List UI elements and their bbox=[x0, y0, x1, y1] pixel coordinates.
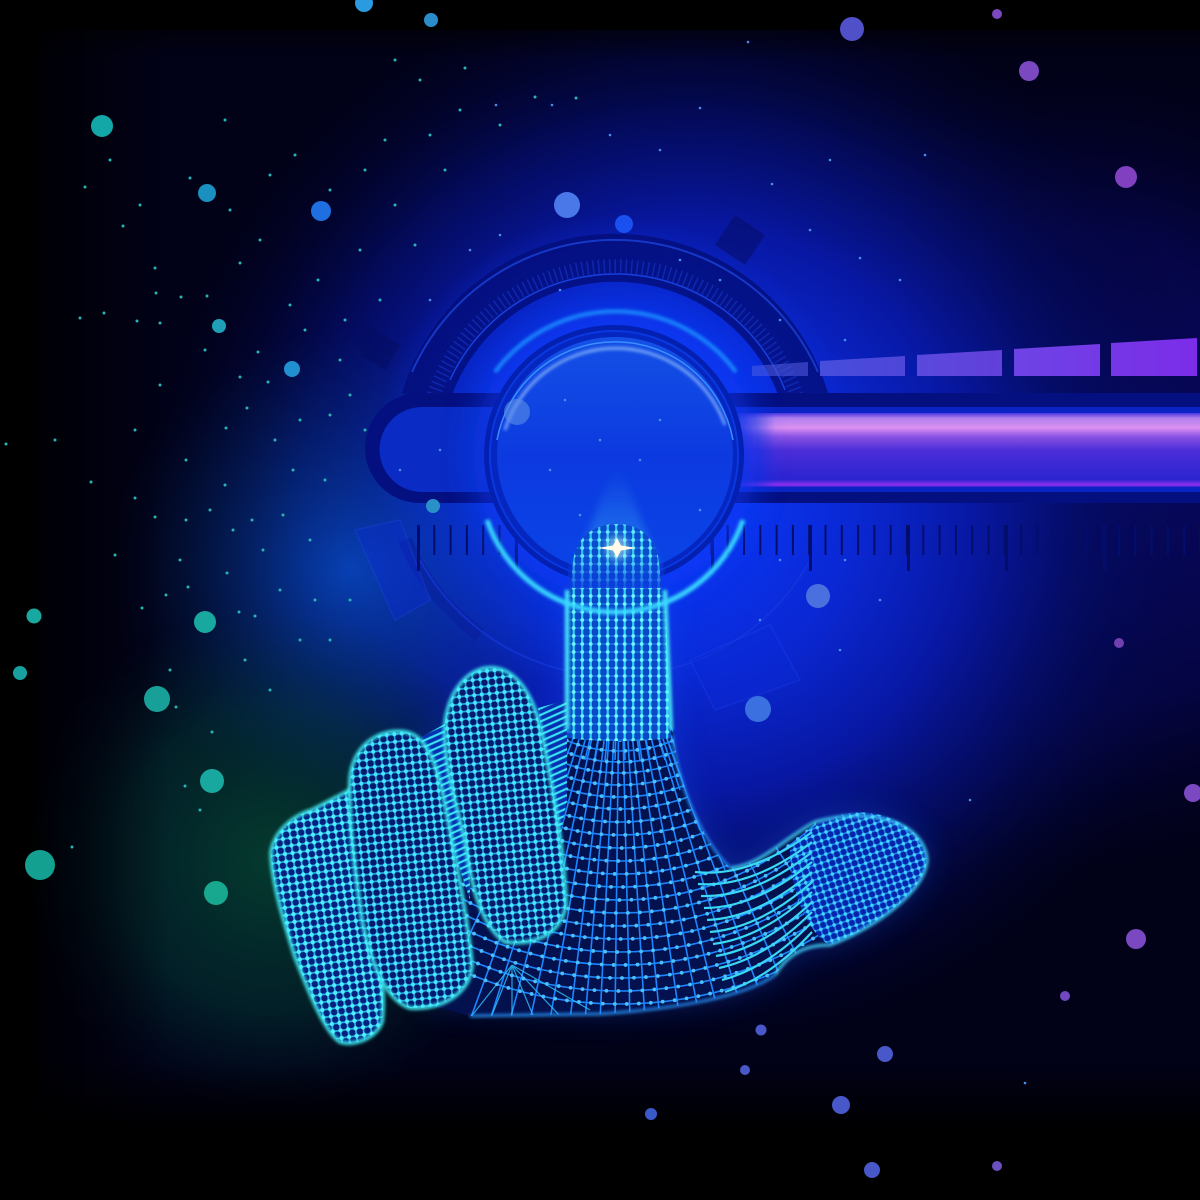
glowing round button bbox=[473, 311, 757, 597]
thumb bbox=[790, 812, 927, 945]
touch spark bbox=[598, 536, 636, 560]
progress step bars bbox=[752, 338, 1197, 376]
webbing stripes bbox=[420, 700, 567, 900]
middle finger bbox=[445, 668, 566, 943]
hand glow bbox=[425, 590, 927, 1012]
thumb-side curved stripes bbox=[695, 832, 812, 992]
glowing cyan arc under the button bbox=[487, 520, 743, 612]
central halo behind the button bbox=[375, 215, 855, 695]
wireframe hand bbox=[266, 587, 938, 1048]
teal particles bbox=[6, 60, 576, 847]
thumb outline bbox=[730, 816, 927, 975]
fingertip touching the button bbox=[568, 524, 664, 590]
ring finger bbox=[350, 731, 472, 1008]
pinky finger bbox=[271, 790, 383, 1043]
scattered small particles bbox=[6, 42, 1025, 1083]
tech dial rings bbox=[355, 215, 818, 710]
blue particles bbox=[400, 42, 1025, 1083]
ruler ticks bbox=[417, 540, 1200, 548]
palm fan lines bbox=[470, 965, 590, 1020]
index finger bbox=[567, 590, 671, 741]
slider track bbox=[365, 393, 1200, 503]
palm outline bbox=[470, 735, 775, 1016]
palm mesh bbox=[435, 722, 822, 1016]
